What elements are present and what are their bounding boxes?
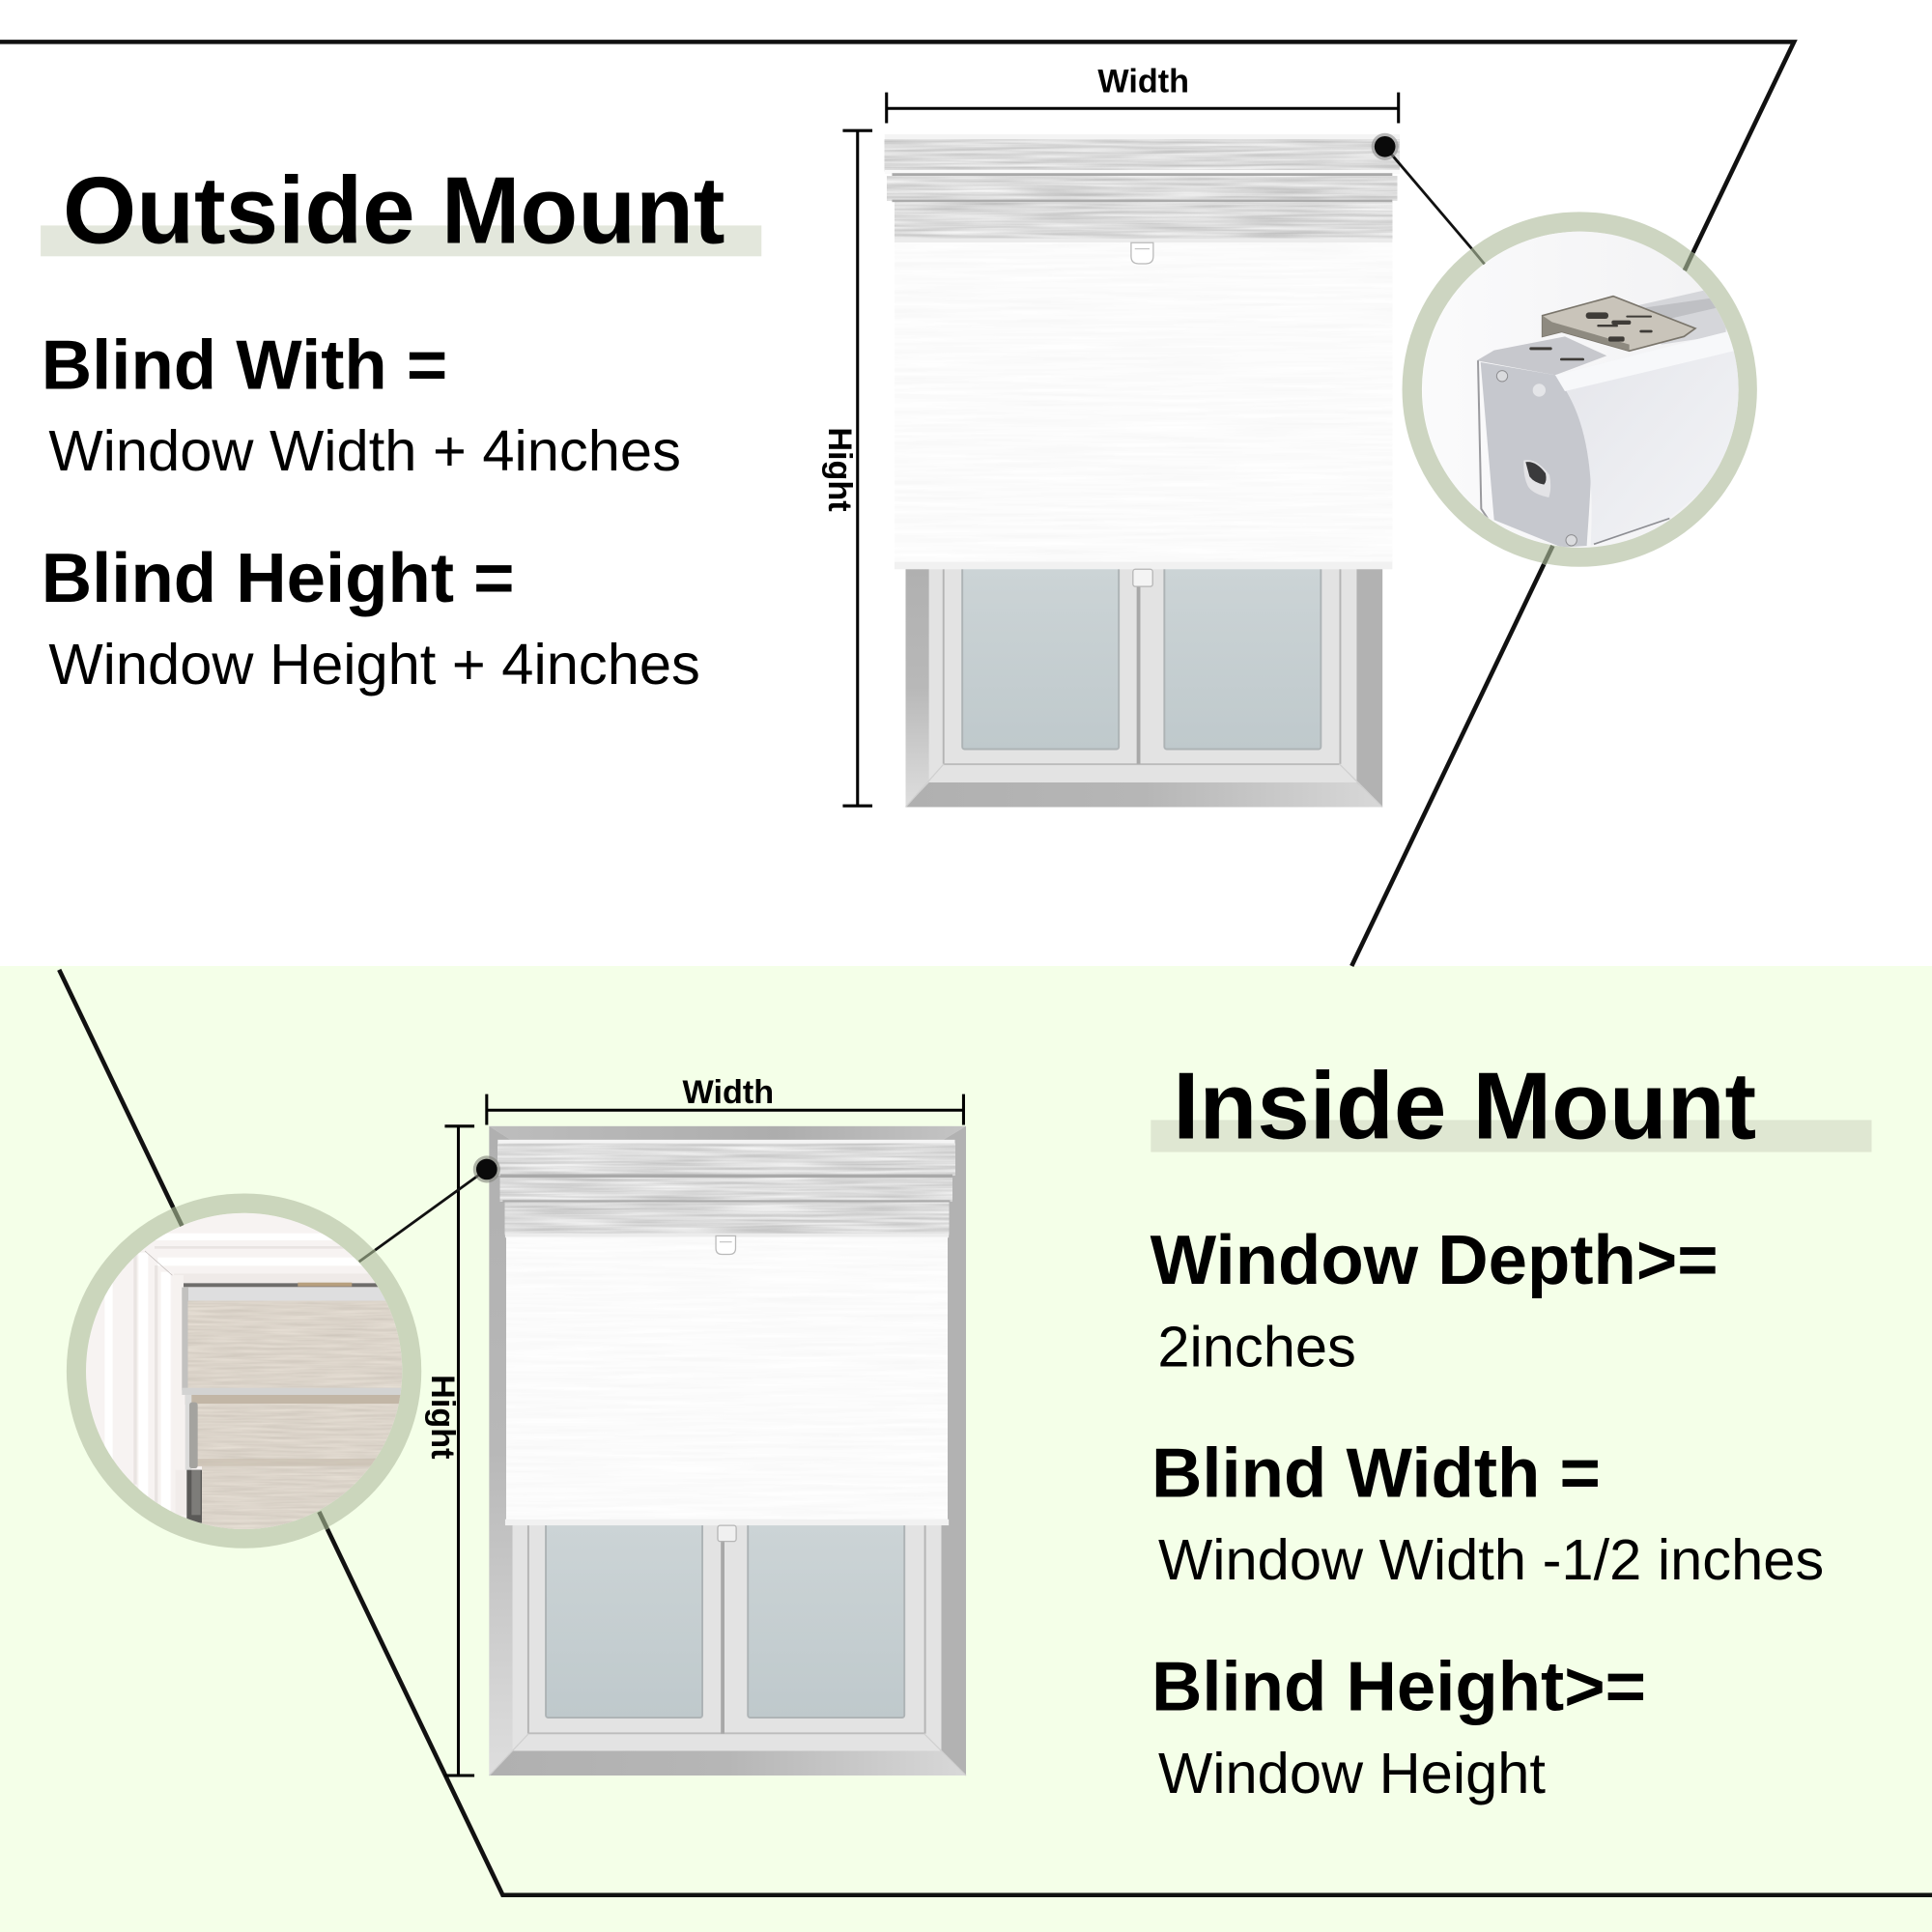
text block: outside mount formulas: Blind Height = bbox=[42, 539, 515, 617]
illustration: outside mount blind bbox=[885, 134, 1400, 569]
connector tints on outside ring bbox=[1471, 248, 1693, 564]
icon: top pull tab inside mount bbox=[716, 1236, 735, 1254]
illustration: inside mount blind bbox=[497, 1140, 955, 1525]
dimension: inside mount width bbox=[487, 1074, 963, 1125]
text block: outside mount formulas: Window Width + 4inches bbox=[48, 418, 681, 483]
dimension: inside mount width: Width bbox=[683, 1074, 774, 1111]
text block: outside mount formulas bbox=[42, 326, 700, 696]
dimension: inside mount height: Hight bbox=[424, 1375, 461, 1459]
dimension: inside mount height bbox=[424, 1126, 474, 1776]
text block: inside mount formulas: 2inches bbox=[1157, 1315, 1356, 1379]
connector tints on inside ring bbox=[173, 1208, 375, 1529]
pointer: inside mount leader line bbox=[375, 1155, 500, 1250]
illustration: window around inside mount blind bbox=[489, 1126, 966, 1776]
heading: outside mount: Outside Mount bbox=[63, 156, 725, 263]
panel: outside mount background bbox=[0, 0, 1932, 966]
panel: inside mount background bbox=[0, 966, 1932, 1932]
dimension: outside mount width: Width bbox=[1097, 64, 1189, 100]
icon: top pull tab outside mount bbox=[1131, 242, 1153, 264]
icon: bottom pull tab outside mount bbox=[1133, 569, 1152, 586]
icon: bottom pull tab inside mount bbox=[718, 1525, 736, 1542]
dimension: outside mount height: Hight bbox=[821, 427, 858, 512]
text block: inside mount formulas: Blind Width = bbox=[1151, 1435, 1601, 1513]
illustration: window under outside mount blind bbox=[906, 567, 1382, 807]
dimension: outside mount height bbox=[821, 130, 872, 806]
text block: outside mount formulas: Window Height + 4inches bbox=[48, 632, 700, 696]
pointer: outside mount leader line bbox=[1372, 133, 1471, 248]
outline: outside mount frame bbox=[0, 42, 1794, 966]
dimension: outside mount width bbox=[887, 64, 1399, 124]
detail circle: inside mount cassette bbox=[76, 1204, 412, 1539]
text block: inside mount formulas: Window Depth>= bbox=[1151, 1221, 1719, 1299]
detail circle: outside mount cassette bbox=[1404, 213, 1758, 567]
text block: inside mount formulas: Blind Height>= bbox=[1151, 1647, 1646, 1725]
outline: inside mount frame bbox=[59, 970, 1932, 1895]
text block: inside mount formulas: Window Height bbox=[1158, 1741, 1546, 1805]
text block: outside mount formulas: Blind With = bbox=[42, 326, 447, 404]
text block: inside mount formulas bbox=[1151, 1221, 1824, 1805]
text block: inside mount formulas: Window Width -1/2 inches bbox=[1158, 1527, 1824, 1592]
heading: inside mount: Inside Mount bbox=[1173, 1053, 1756, 1159]
